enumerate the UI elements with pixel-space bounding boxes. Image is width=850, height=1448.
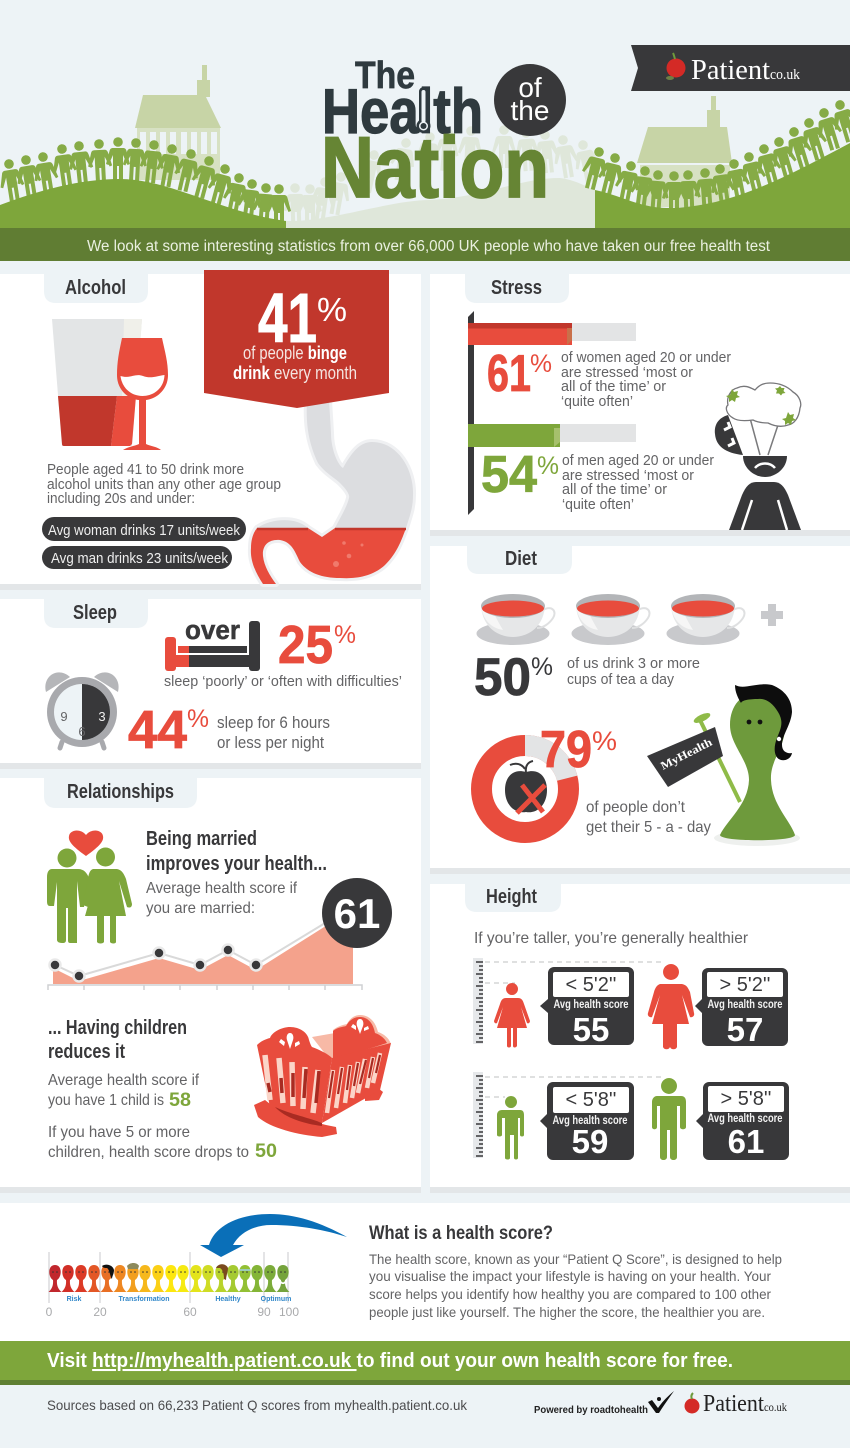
logo: patient footer: Patient <box>703 1391 764 1417</box>
text: alcohol age group: People aged 41 to 50 drink more <box>47 461 244 478</box>
icon: alarm clock: 9 <box>60 709 68 724</box>
text: alcohol age group: including 20s and under: <box>47 490 195 507</box>
box: over 5'2: > 5'2'' <box>720 974 770 996</box>
icon: apple crossed <box>505 761 547 813</box>
icon: alarm clock: 6 <box>78 724 86 739</box>
stat: 25%: % <box>334 621 356 649</box>
score scale: Healthy <box>215 1296 241 1303</box>
text: men stress: of men aged 20 or under <box>562 452 714 469</box>
call to action band <box>0 1341 850 1385</box>
icon: apple <box>666 53 686 80</box>
panel: height <box>430 884 850 1193</box>
left people row <box>0 137 291 227</box>
text: alcohol age group: alcohol units than any other age group <box>47 476 281 493</box>
text: being married: Average health score if <box>146 880 298 897</box>
panel: diet <box>430 546 850 874</box>
icon: tea cup 3 <box>666 594 744 645</box>
icon: wine glass <box>117 338 168 450</box>
text: sources: Sources based on 66,233 Patient Q scores from myhealth.patient.co.uk <box>47 1397 468 1413</box>
chart: 79% donut <box>482 735 577 832</box>
text: 5 a day <box>586 799 711 836</box>
axis bar <box>468 311 474 515</box>
heading: diet: Diet <box>505 548 537 570</box>
logo: patient footer <box>684 1391 787 1417</box>
text: having children: 50 <box>255 1141 277 1162</box>
icon: alarm clock <box>45 672 119 748</box>
pale people row <box>283 125 603 227</box>
pill: woman units: Avg woman drinks 17 units/week <box>48 523 241 539</box>
right hill <box>595 143 850 228</box>
badge: of the <box>494 64 566 136</box>
stat: 25%: 25 <box>278 615 333 675</box>
icon: cradle <box>254 1015 391 1137</box>
box: under 5'8: Avg health score <box>552 1115 628 1127</box>
text: tea: cups of tea a day <box>567 671 674 688</box>
text: having children: you have 1 child is <box>48 1092 164 1109</box>
stat: 54%: % <box>537 452 559 480</box>
heading: sleep: Sleep <box>73 602 117 624</box>
panel: what is a health score <box>0 1203 850 1341</box>
stat: 50%: % <box>531 653 553 681</box>
score scale <box>46 1252 299 1319</box>
text: taller: If you’re taller, you’re generally healthier <box>474 930 749 947</box>
call to action band: Visit http://myhealth.patient.co.uk to find out your own health score for free. <box>47 1349 733 1372</box>
heading: diet <box>467 546 572 574</box>
box: over 5'8: > 5'8'' <box>721 1088 771 1110</box>
callout: 41%: drink every month <box>233 363 357 383</box>
panel: relationships <box>0 778 421 1193</box>
heading: relationships <box>44 778 197 808</box>
icon: tea cup 1 <box>476 594 554 645</box>
pill: man units: Avg man drinks 23 units/week <box>51 551 229 567</box>
text: being married: improves your health... <box>146 853 327 875</box>
icon: thermometer <box>416 87 430 133</box>
text: having children: If you have 5 or more <box>48 1124 190 1141</box>
intro band <box>0 228 850 261</box>
pale centre hill <box>286 178 595 228</box>
text: having children: children, health score drops to <box>48 1144 249 1161</box>
icon: stressed person <box>715 383 801 530</box>
text: health score explanation: score helps you identify how healthy you are compared to 100 other <box>369 1286 771 1302</box>
text: having children: ... Having children <box>48 1017 187 1039</box>
score scale: 0 <box>46 1305 53 1319</box>
bar: women 61% <box>468 323 636 345</box>
logo banner: co.uk <box>770 67 800 83</box>
icon: pint glass <box>52 319 142 446</box>
heading: height <box>465 884 561 912</box>
left hill <box>0 179 286 228</box>
badge: of the: of <box>518 72 542 103</box>
box: over 5'8 <box>696 1082 789 1160</box>
title: The <box>355 55 415 97</box>
callout: 41%: % <box>317 291 347 328</box>
ruler: women <box>473 958 665 1044</box>
icon: short woman <box>494 983 530 1048</box>
score scale: Optimum <box>261 1296 291 1303</box>
heading: stress <box>465 274 569 303</box>
text: women stress <box>561 349 731 410</box>
title: Health <box>322 77 483 147</box>
intro band: We look at some interesting statistics from over 66,000 UK people who have taken our free health test <box>87 238 771 255</box>
text: tea <box>567 655 700 688</box>
icon: stomach <box>251 400 413 584</box>
text: being married <box>146 828 327 917</box>
panel: stress <box>430 274 850 536</box>
panel: alcohol <box>0 270 421 590</box>
stat: 79%: % <box>592 726 617 756</box>
text: health score explanation: The health score, known as your “Patient Q Score”, is designed to help <box>369 1251 782 1267</box>
text: having children <box>48 1017 277 1162</box>
icon: bed <box>165 615 260 671</box>
stat: 50%: 50 <box>474 648 531 707</box>
badge: score 61: 61 <box>334 890 380 937</box>
heading: alcohol <box>44 274 148 303</box>
text: having children: 58 <box>169 1090 191 1111</box>
badge: of the: the <box>511 95 549 126</box>
icon: character with flag: MyHealth <box>659 736 715 773</box>
panel: sleep <box>0 599 421 769</box>
box: under 5'8: < 5'8'' <box>566 1089 616 1111</box>
title: Nation <box>321 120 549 216</box>
stat: 44%: 44 <box>128 700 187 760</box>
box: under 5'2: Avg health score <box>554 999 628 1011</box>
box: under 5'8: 59 <box>572 1123 608 1160</box>
text: 5 a day: get their 5 - a - day <box>586 819 711 836</box>
title <box>321 55 549 216</box>
text: 5 a day: of people don’t <box>586 799 686 816</box>
box: over 5'2: Avg health score <box>708 999 782 1011</box>
arrow <box>200 1214 347 1257</box>
line chart: health score <box>48 878 392 990</box>
text: health score explanation: you visualise the impact your lifestyle is having on your health. Your <box>369 1268 771 1284</box>
box: under 5'8 <box>540 1082 634 1160</box>
text: women stress: ‘quite often’ <box>561 393 633 410</box>
heading: sleep <box>44 599 148 628</box>
stat: 54%: 54 <box>481 446 537 504</box>
box: over 5'2: 57 <box>727 1011 763 1048</box>
icon: tall woman <box>648 964 694 1049</box>
box: over 5'2 <box>695 968 788 1048</box>
header illustration <box>0 65 850 228</box>
icon: tea cup 2 <box>572 594 650 645</box>
text: having children: reduces it <box>48 1041 125 1063</box>
callout: 41% <box>204 270 389 408</box>
callout: 41%: 41 <box>258 279 317 357</box>
text: alcohol age group <box>47 461 281 507</box>
heading: stress: Stress <box>491 277 542 299</box>
score scale: 100 <box>279 1305 299 1319</box>
text: men stress <box>562 452 714 513</box>
box: over 5'8: Avg health score <box>708 1113 782 1125</box>
score scale: Transformation <box>119 1296 169 1303</box>
callout: 41%: of people binge <box>243 343 347 363</box>
text: men stress: all of the time’ or <box>562 481 667 498</box>
heading: relationships: Relationships <box>67 781 174 803</box>
stat: 61%: % <box>530 350 552 378</box>
right people row <box>578 97 850 214</box>
ruler: men <box>473 1072 665 1158</box>
left house <box>135 65 221 180</box>
right house <box>637 96 732 207</box>
logo banner: Patient <box>691 54 770 86</box>
text: men stress: are stressed ‘most or <box>562 467 694 484</box>
score scale: 90 <box>257 1305 271 1319</box>
bar: men 54% <box>468 424 636 447</box>
text: having children: Average health score if <box>48 1072 200 1089</box>
text: health score explanation: people just like yourself. The higher the score, the healthier you are. <box>369 1304 765 1320</box>
text: women stress: are stressed ‘most or <box>561 364 693 381</box>
box: under 5'2: < 5'2'' <box>566 974 616 996</box>
logo: patient footer: co.uk <box>764 1400 787 1414</box>
score scale: 20 <box>93 1305 107 1319</box>
text: women stress: of women aged 20 or under <box>561 349 731 366</box>
stat: 44%: % <box>187 705 209 733</box>
score scale: Risk <box>67 1296 81 1303</box>
box: under 5'2: 55 <box>573 1011 609 1048</box>
icon: bed: over <box>185 615 240 645</box>
text: sleep hours: sleep for 6 hours <box>217 713 330 732</box>
heading: alcohol: Alcohol <box>65 277 126 299</box>
text: health score explanation <box>369 1251 782 1320</box>
icon: alarm clock: 3 <box>98 709 106 724</box>
text: sleep poorly: sleep ‘poorly’ or ‘often with difficulties’ <box>164 673 402 690</box>
icon: tall man <box>652 1078 686 1160</box>
text: women stress: all of the time’ or <box>561 378 666 395</box>
logo: road to health: Powered by roadtohealth <box>534 1405 648 1416</box>
badge: score 61 <box>322 878 392 948</box>
box: over 5'8: 61 <box>728 1123 764 1160</box>
text: sleep hours <box>217 713 330 752</box>
score scale: 60 <box>183 1305 197 1319</box>
text: men stress: ‘quite often’ <box>562 496 634 513</box>
stat: 61%: 61 <box>487 345 531 403</box>
icon: couple with heart <box>47 831 132 944</box>
text: being married: you are married: <box>146 900 255 917</box>
text: sleep hours: or less per night <box>217 733 324 752</box>
icon: plus <box>761 604 783 626</box>
text: being married: Being married <box>146 828 257 850</box>
stat: 79%: 79 <box>540 721 592 779</box>
pill: woman units <box>42 517 246 541</box>
icon: character with flag <box>647 684 800 846</box>
text: tea: of us drink 3 or more <box>567 655 700 672</box>
heading: what is a health score: What is a health score? <box>369 1223 553 1244</box>
heading: height: Height <box>486 886 537 908</box>
logo: road to health <box>534 1391 674 1416</box>
icon: short man <box>497 1096 524 1160</box>
logo banner <box>631 45 850 91</box>
box: under 5'2 <box>540 967 634 1048</box>
pill: man units <box>42 546 232 569</box>
